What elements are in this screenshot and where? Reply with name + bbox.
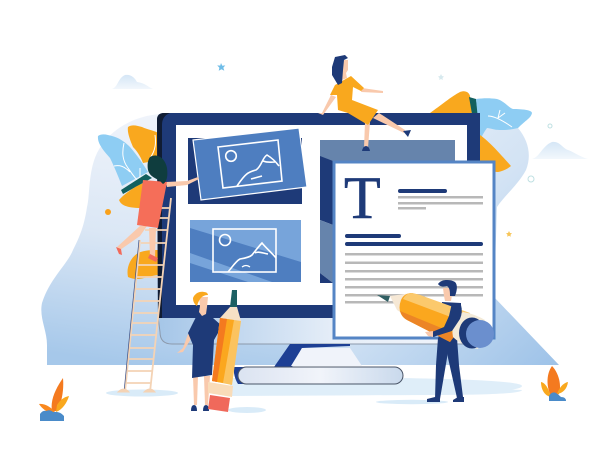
star pale [438,74,444,80]
small pencil [208,290,241,412]
monitor [157,113,480,367]
monitor screen [176,125,467,305]
big letter T: T [344,165,381,231]
document page [334,162,494,338]
woman with pencil [177,290,241,412]
orange dot [105,209,111,215]
picture icon 1 [218,140,282,188]
man carrying big pencil [377,280,494,402]
image card 1 [188,128,307,204]
plant: bottom left [39,378,69,421]
big pencil [377,293,494,349]
picture icon 2 [213,229,276,272]
monitor left edge [157,113,170,318]
document side [320,156,333,225]
star blue [217,63,225,71]
star yellow [506,231,512,237]
ladder [118,198,171,392]
monitor chin [158,316,480,344]
monitor stand [274,344,350,367]
book base [234,367,403,384]
plant: left leaves behind monitor [98,125,160,279]
decorative circles [528,124,552,182]
monitor frame [157,113,480,318]
document back panel [320,140,455,162]
woman on ladder [116,155,199,262]
text lines [345,189,483,304]
background blob left [41,114,300,365]
woman sitting on monitor [318,55,411,151]
cloud left [112,75,153,89]
plant: bottom right [541,366,568,401]
cloud right [532,142,588,159]
background blob right [300,128,559,365]
text document [320,140,494,338]
image card 2 [190,220,301,282]
plant: right leaves behind monitor [430,91,532,172]
ground shadows [106,378,522,413]
